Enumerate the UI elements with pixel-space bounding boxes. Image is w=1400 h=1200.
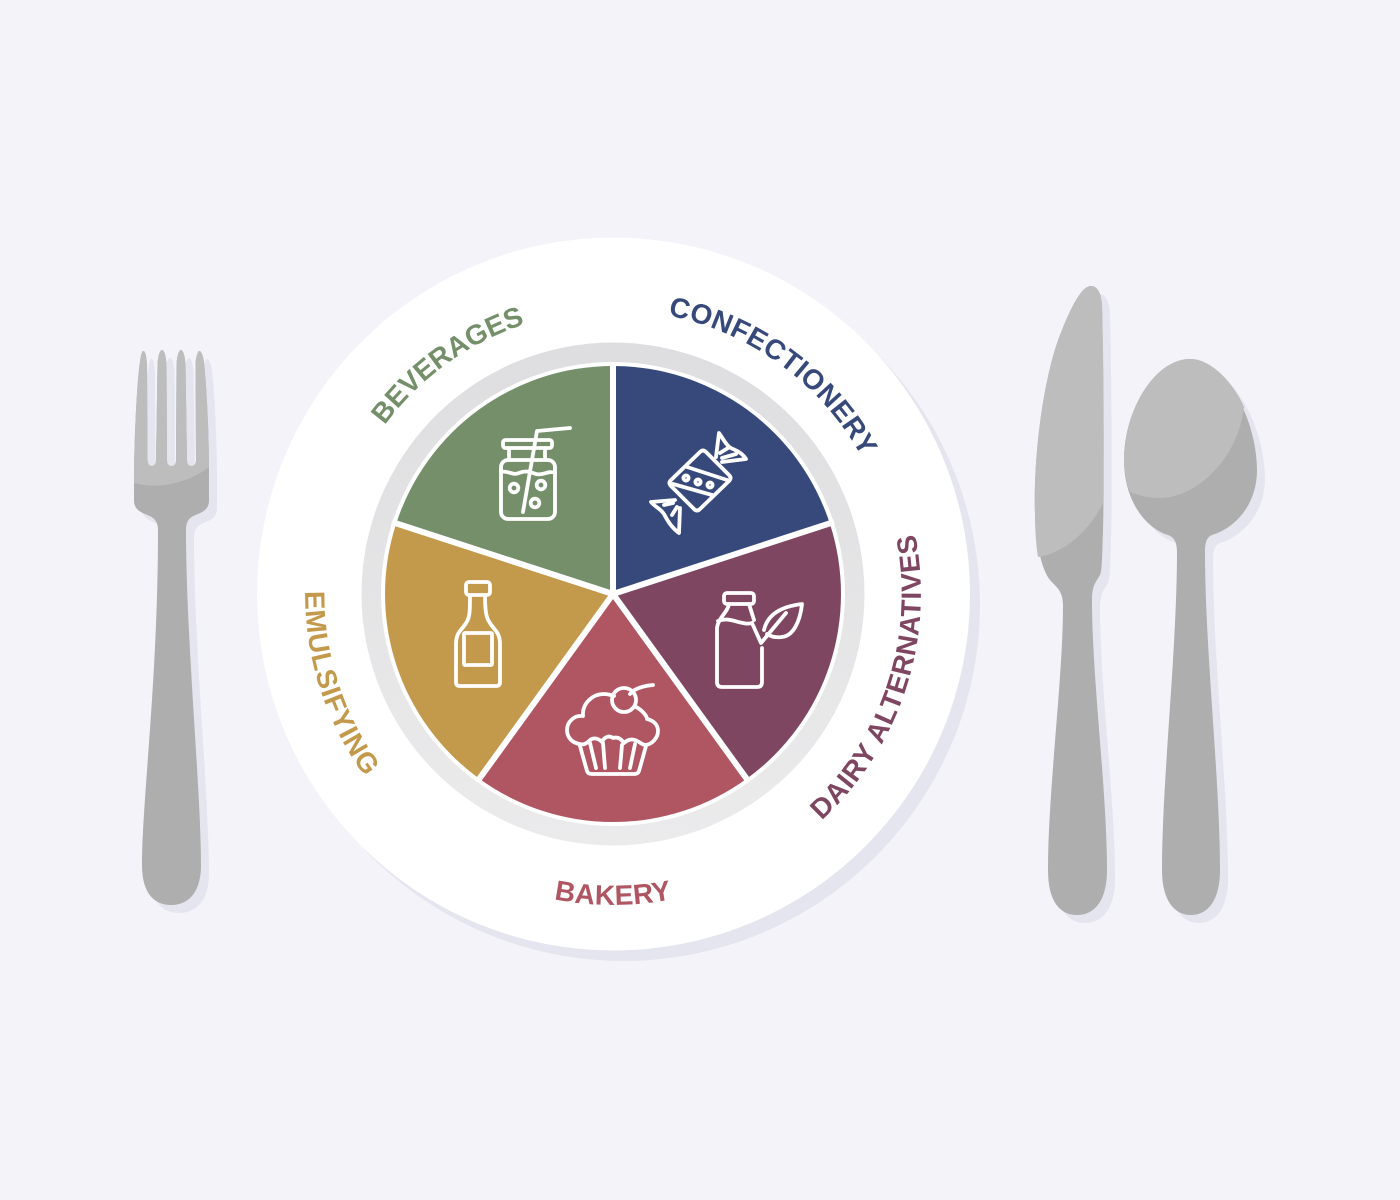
icon: sauce bottle: [456, 582, 500, 686]
icon: knife: [1035, 286, 1115, 923]
icon: jar with straw: [501, 428, 570, 519]
label: emulsifying: EMULSIFYING: [305, 592, 378, 774]
label: confectionery: CONFECTIONERY: [670, 298, 878, 451]
slice: beverages: [396, 366, 613, 594]
icon: cupcake: [567, 685, 658, 774]
icon: milk bottle with leaf: [717, 593, 802, 687]
icon: fork: [134, 350, 217, 913]
icon: candy: [651, 433, 746, 533]
plate: [257, 238, 980, 961]
label: dairy alternatives: DAIRY ALTERNATIVES: [810, 536, 921, 820]
label: bakery: BAKERY: [556, 880, 668, 905]
label: beverages: BEVERAGES: [370, 308, 522, 424]
icon: spoon: [1124, 359, 1265, 923]
slice: bakery: [479, 594, 747, 822]
slice: dairy alternatives: [613, 524, 841, 778]
slice: emulsifying: [385, 524, 613, 778]
slice: confectionery: [613, 366, 830, 594]
